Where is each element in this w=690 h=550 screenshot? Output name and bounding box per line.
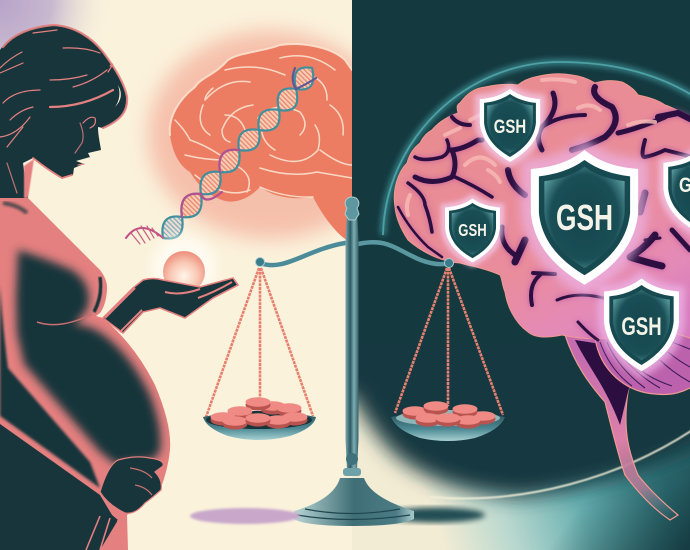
- DNA purple tip: [293, 68, 316, 89]
- hand on belly: [100, 457, 163, 513]
- cerebellum stripes: [600, 342, 690, 388]
- shield: lower-left GSH: [449, 203, 496, 258]
- brain stem shadow: [575, 340, 630, 425]
- scale: column and base: [294, 197, 414, 526]
- brain sulci: [398, 87, 690, 340]
- neck highlight: [24, 159, 34, 198]
- right pan interior: [396, 410, 500, 426]
- shield: lower-right GSH: [609, 285, 674, 365]
- halo arc around brain: [383, 62, 690, 498]
- left pan bowl: [203, 411, 316, 440]
- shield: large GSH: [539, 160, 630, 275]
- DNA tail: [126, 228, 163, 238]
- right chains: [395, 268, 503, 415]
- hair highlights: [0, 25, 127, 193]
- shield: upper GSH: [484, 94, 536, 157]
- lower body shadow: [0, 424, 118, 550]
- background: lilac corner glow: [0, 0, 130, 120]
- right scale pan with chains and tablets: [391, 268, 505, 441]
- left floor shadow: [190, 508, 300, 524]
- sleeve shadow: [0, 285, 100, 488]
- raised arm pink edge: [105, 282, 232, 332]
- left brain folds: [170, 44, 352, 197]
- DNA rungs: [181, 67, 313, 217]
- left brain with glow: [148, 31, 392, 243]
- scale: beam end ball right: [444, 258, 454, 268]
- shield: lower-right GSH: GSH: [621, 314, 662, 341]
- right brain: [394, 74, 690, 520]
- brain highlights: [407, 79, 655, 215]
- scale collar: [343, 468, 361, 476]
- brain body: [394, 74, 690, 340]
- scale finial: [345, 197, 359, 220]
- right pan bowl: [391, 411, 505, 441]
- left tablets: [210, 397, 308, 430]
- DNA magenta strand accents: [181, 150, 239, 217]
- shield: right edge GSH: [668, 157, 690, 227]
- torso shadow: chest and belly: [16, 250, 161, 464]
- scale base rings: [297, 509, 410, 520]
- brain sulci depth: [398, 87, 690, 340]
- shield: upper GSH: GSH: [494, 116, 526, 138]
- fold beside chest: [94, 277, 101, 312]
- finger highlights: [130, 468, 152, 495]
- shield: large GSH: GSH: [556, 197, 613, 238]
- dress folds: [86, 516, 118, 550]
- DNA tail rungs: [131, 226, 158, 244]
- hair gap: [115, 85, 121, 107]
- neck shadow on shoulder: [3, 203, 27, 213]
- scale stem: [346, 212, 358, 470]
- DNA strand two: [162, 68, 313, 238]
- raised arm and open hand: [103, 278, 238, 333]
- background: cream left panel: [0, 0, 352, 550]
- right tablets: [402, 401, 496, 428]
- left pan interior: [206, 411, 312, 429]
- scale base: [294, 478, 414, 526]
- DNA strand one: [163, 67, 312, 239]
- body pink base: [0, 196, 170, 550]
- under-chest highlight: [37, 314, 92, 325]
- pregnant woman silhouette: [0, 25, 238, 550]
- left scale pan with chains and tablets: [203, 268, 316, 440]
- scale: beam end ball left: [256, 258, 264, 266]
- brain stem: [565, 335, 678, 520]
- head and hair: [0, 25, 127, 198]
- panel: dark right background: [352, 0, 690, 550]
- shield: lower-left GSH: GSH: [458, 221, 487, 240]
- DNA helix: [126, 67, 316, 244]
- left chains: [206, 268, 313, 417]
- scale: beam: [256, 242, 454, 268]
- DNA lower rungs: [162, 216, 183, 239]
- scale lower knob: [346, 453, 358, 465]
- cerebellum: [594, 334, 690, 396]
- glowing orb: [152, 236, 216, 300]
